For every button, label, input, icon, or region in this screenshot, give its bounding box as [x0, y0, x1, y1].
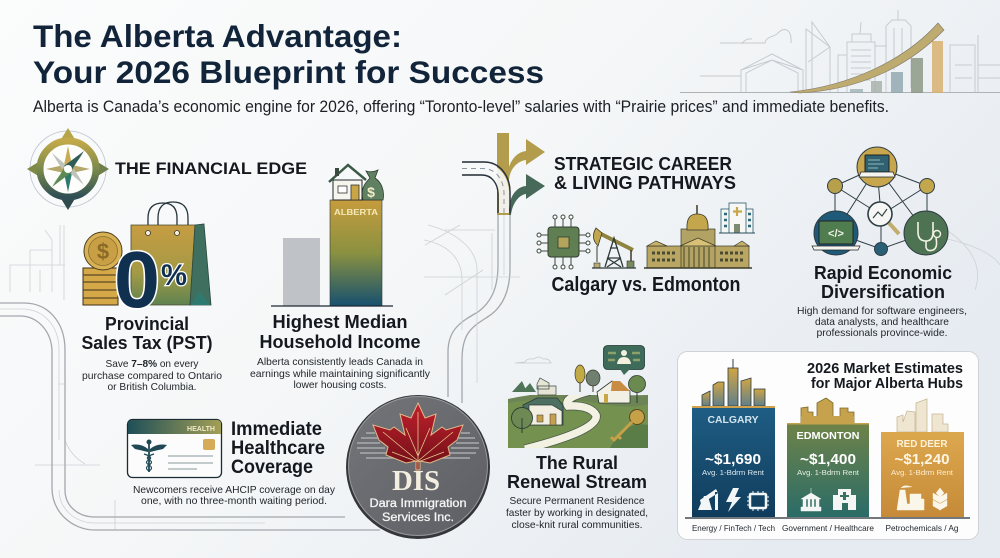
skyline illustration: [680, 10, 1000, 93]
text: healthcare description: one, with no three-month waiting period.: [141, 495, 327, 507]
title: The Alberta Advantage:: [33, 18, 402, 54]
heading: highest median household income: Household Income: [260, 331, 420, 352]
heading: the rural renewal stream: Renewal Stream: [507, 472, 647, 492]
text: diversification description: [797, 305, 967, 339]
panel: rural renewal stream: [506, 346, 648, 531]
text: income description: Alberta consistently leads Canada in: [257, 356, 423, 368]
column: Calgary: Avg. 1-Bdrm Rent: [702, 468, 765, 477]
panel: market estimates: [678, 352, 978, 540]
text: rural stream description: Secure Permanent Residence: [510, 495, 645, 507]
heading: the financial edge: THE FINANCIAL EDGE: [115, 159, 307, 178]
text: diversification description: data analysts, and healthcare: [815, 316, 949, 328]
column: Edmonton: EDMONTON: [796, 431, 860, 442]
panel: highest median household income: [250, 165, 431, 391]
heading: market estimates: for Major Alberta Hubs: [811, 375, 963, 392]
icon: compass: [27, 128, 109, 210]
heading: calgary vs edmonton: Calgary vs. Edmonton: [552, 274, 740, 296]
icon: lightning bolt: [726, 488, 741, 512]
heading: market estimates: 2026 Market Estimates: [807, 360, 963, 377]
baseline: [685, 517, 970, 519]
column: Edmonton: Avg. 1-Bdrm Rent: [797, 468, 860, 477]
icon: wheat: [933, 488, 947, 511]
panel: immediate healthcare coverage: [128, 419, 336, 507]
heading: immediate healthcare coverage: Coverage: [231, 457, 313, 478]
column: Red Deer: RED DEER: [896, 439, 948, 450]
logo: Dara Immigration Services: DIS: [392, 465, 440, 497]
heading: rapid economic diversification: [814, 262, 952, 302]
text: rural stream description: close-knit rural communities.: [512, 519, 642, 531]
panel: rapid economic diversification: [797, 147, 967, 339]
icon: legislature building: [644, 205, 752, 268]
sector labels: Energy / FinTech / Tech: [692, 523, 775, 533]
text: income description: [250, 356, 431, 391]
panel: strategic career and living pathways: [462, 133, 755, 296]
icon: skills network: </>: [828, 228, 844, 240]
logo: Dara Immigration Services: Dara Immigration: [370, 498, 466, 510]
heading: provincial sales tax: Sales Tax (PST): [82, 333, 213, 353]
icon: health card: HEALTH: [187, 426, 215, 433]
heading: the rural renewal stream: [507, 453, 647, 492]
heading: strategic career and living pathways: [554, 154, 736, 193]
panel: provincial sales tax: [82, 202, 222, 393]
bar chart: income comparison: ALBERTA: [334, 208, 378, 217]
heading: provincial sales tax: Provincial: [105, 314, 189, 334]
icon: rural landscape with road, houses and key: [508, 346, 648, 449]
text: diversification description: High demand for software engineers,: [797, 305, 967, 317]
icon: chip: [747, 491, 769, 511]
text: sales tax savings: Save 7–8% on every: [106, 358, 199, 370]
text: rural stream description: [506, 495, 648, 531]
column: Red Deer: [881, 399, 964, 517]
icon: microchip: [537, 215, 590, 269]
icon: shopping bag with coins and zero percent: 0: [114, 235, 160, 324]
title: Your 2026 Blueprint for Success: [33, 54, 544, 90]
icon: hospital building: [833, 489, 856, 510]
column: Edmonton: [787, 398, 869, 517]
column: Red Deer: Avg. 1-Bdrm Rent: [891, 468, 954, 477]
sector labels: Petrochemicals / Ag: [886, 523, 959, 533]
heading: strategic career and living pathways: STRATEGIC CAREER: [554, 154, 732, 174]
icon: shopping bag with coins and zero percent: %: [161, 259, 187, 292]
icon: refinery: [897, 486, 924, 510]
column: Calgary: CALGARY: [708, 415, 759, 426]
heading: market estimates: [807, 360, 963, 392]
heading: provincial sales tax: [82, 314, 213, 353]
icon: skills network: [812, 147, 948, 256]
text: sales tax savings: purchase compared to Ontario: [82, 370, 222, 382]
text: rural stream description: faster by working in designated,: [506, 507, 648, 519]
icon: shopping bag with coins and zero percent: [83, 202, 211, 324]
column: Calgary: [692, 359, 775, 517]
column: Red Deer: ~$1,240: [894, 452, 950, 468]
icon: shopping bag with coins and zero percent: $: [97, 239, 109, 264]
logo: Dara Immigration Services: [346, 395, 490, 539]
text: income description: lower housing costs.: [294, 379, 386, 391]
bar chart: income comparison: $: [367, 184, 375, 200]
icon: government building: [801, 488, 821, 511]
heading: immediate healthcare coverage: [231, 419, 325, 478]
heading: highest median household income: [260, 311, 420, 352]
heading: highest median household income: Highest Median: [272, 311, 408, 332]
text: sales tax savings: or British Columbia.: [108, 381, 196, 393]
logo: Dara Immigration Services: Services Inc.: [382, 512, 454, 524]
text: healthcare description: Newcomers receive AHCIP coverage on day: [133, 484, 336, 496]
icon: pumpjack: [592, 228, 636, 268]
heading: immediate healthcare coverage: Healthcare: [231, 438, 325, 459]
sector labels: [692, 523, 959, 533]
icon: road and signpost arrows: [462, 133, 545, 215]
heading: immediate healthcare coverage: Immediate: [231, 419, 322, 440]
text: healthcare description: [133, 484, 336, 507]
background roads and blueprint lines: [0, 162, 1000, 530]
bar chart: income comparison: [271, 165, 393, 306]
column: Calgary: ~$1,690: [705, 452, 761, 468]
heading: the rural renewal stream: The Rural: [536, 453, 618, 473]
title: [33, 18, 544, 90]
column: Edmonton: ~$1,400: [800, 452, 856, 468]
heading: rapid economic diversification: Rapid Economic: [814, 262, 952, 283]
sector labels: Government / Healthcare: [782, 523, 874, 533]
heading: strategic career and living pathways: & LIVING PATHWAYS: [554, 173, 736, 193]
subtitle: Alberta is Canada’s economic engine for 2026, offering “Toronto-level” salaries with “Prairie prices” and immediate benefits.: [33, 98, 889, 116]
text: income description: earnings while maintaining significantly: [250, 368, 431, 380]
icon: health card: [128, 420, 222, 478]
heading: rapid economic diversification: Diversification: [821, 281, 945, 302]
icon: oil pump: [698, 489, 718, 510]
text: sales tax savings: [82, 358, 222, 393]
text: diversification description: professionals province-wide.: [816, 327, 948, 339]
icon: hospital: [719, 203, 755, 233]
